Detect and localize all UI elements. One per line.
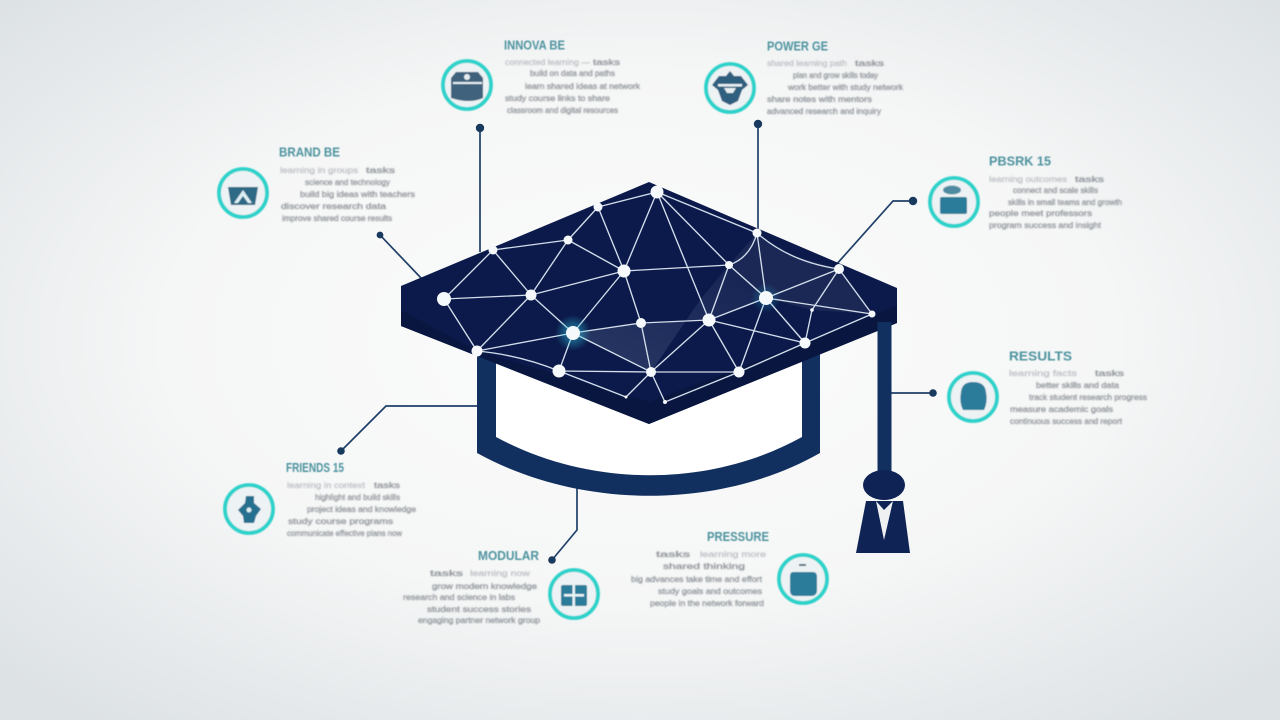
text block: research and science in labs (403, 592, 515, 602)
text block: student success stories (427, 604, 531, 614)
text block: tasks (430, 568, 463, 578)
icon: mentor badge (706, 64, 754, 112)
text block (767, 58, 904, 116)
text block: advanced research and inquiry (767, 106, 882, 116)
text block: learning in groups (280, 165, 358, 175)
heading: FRIENDS 15 (286, 460, 344, 475)
mortarboard (401, 182, 897, 424)
text block: tasks (366, 165, 395, 175)
text block: science and technology (305, 177, 391, 187)
text block: tasks (1095, 368, 1124, 378)
text block: grow modern knowledge (432, 581, 537, 591)
heading: PBSRK 15 (989, 154, 1051, 168)
text block: study goals and outcomes (658, 586, 762, 596)
text block: shared learning path (767, 58, 847, 68)
panel: right (949, 348, 1147, 426)
panel: lower left (225, 460, 416, 538)
cap base band (477, 345, 820, 496)
panel: bottom right (631, 529, 827, 608)
text block (505, 57, 641, 115)
text block: continuous success and report (1010, 416, 1123, 426)
network edges (444, 192, 872, 402)
text block: better skills and data (1036, 380, 1119, 390)
text block: learning outcomes (989, 174, 1067, 184)
text block: big advances take time and effort (631, 574, 763, 584)
text block: plan and grow skills today (793, 70, 879, 80)
text block: program success and insight (989, 220, 1102, 230)
text block (631, 549, 766, 608)
text block: learning more (700, 549, 766, 559)
text block: communicate effective plans now (287, 528, 403, 538)
heading: RESULTS (1009, 348, 1072, 364)
panel: upper right (930, 154, 1122, 230)
icon: pin badge (225, 485, 273, 533)
text block: improve shared course results (282, 213, 392, 223)
text block (280, 165, 415, 223)
heading: POWER GE (767, 38, 828, 54)
icon: folder badge (219, 169, 267, 217)
icon: book badge (550, 570, 598, 618)
heading: INNOVA BE (504, 38, 565, 52)
icon: globe badge (949, 373, 997, 421)
text block: discover research data (281, 201, 386, 211)
text block: learning in context (287, 480, 366, 490)
connector lines (337, 120, 937, 564)
text block: share notes with mentors (767, 94, 872, 104)
text block: shared thinking (663, 561, 745, 571)
text block: measure academic goals (1010, 404, 1113, 414)
text block (287, 480, 416, 538)
panel: top left (443, 38, 641, 115)
text block: build big ideas with teachers (300, 189, 415, 199)
heading: MODULAR (478, 548, 540, 563)
text block: tasks (855, 58, 884, 68)
graduation cap (401, 182, 910, 553)
text block: study course links to share (505, 93, 610, 103)
tassel (856, 322, 910, 553)
network nodes (437, 186, 876, 404)
text block: project ideas and knowledge (307, 504, 416, 514)
front edge shading (401, 305, 897, 424)
panel: bottom centre (403, 548, 598, 625)
heading: PRESSURE (707, 529, 769, 544)
text block (989, 174, 1122, 230)
icon: bag badge (779, 555, 827, 603)
text block: tasks (593, 57, 620, 67)
text block: learning now (470, 568, 531, 578)
text block: skills in small teams and growth (1008, 197, 1122, 207)
text block (403, 568, 540, 625)
icon: case badge (930, 178, 978, 226)
text block: tasks (1075, 174, 1104, 184)
text block: people in the network forward (650, 598, 764, 608)
text block: connected learning — (505, 57, 591, 67)
text block: track student research progress (1029, 392, 1147, 402)
text block: connect and scale skills (1013, 185, 1098, 195)
text block: people meet professors (989, 208, 1092, 218)
text block: work better with study network (787, 82, 904, 92)
text block: study course programs (288, 516, 393, 526)
icon: briefcase badge (443, 61, 491, 109)
text block: learn shared ideas at network (525, 81, 641, 91)
heading: BRAND BE (279, 144, 340, 160)
text block: build on data and paths (530, 68, 615, 78)
text block: highlight and build skills (315, 492, 400, 502)
white inner of band (496, 362, 802, 475)
panel: top right (706, 38, 904, 116)
text block: tasks (374, 480, 400, 490)
text block: learning facts (1009, 368, 1077, 378)
lighter facets (573, 265, 766, 372)
panel: upper left (219, 144, 415, 223)
text block: engaging partner network group (418, 615, 540, 625)
text block: classroom and digital resources (507, 105, 618, 115)
text block: tasks (656, 549, 690, 559)
text block (1009, 368, 1147, 426)
